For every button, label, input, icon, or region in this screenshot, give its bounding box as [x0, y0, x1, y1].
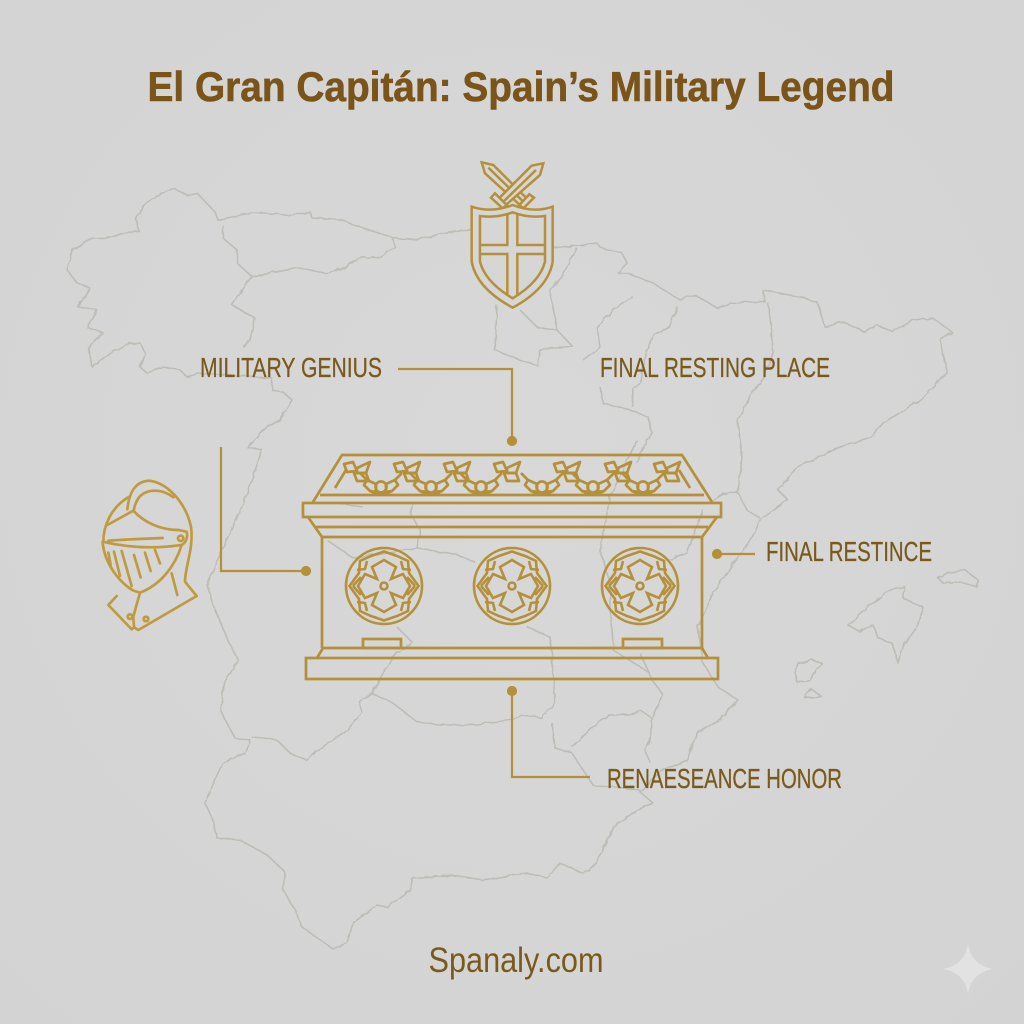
- sarcophagus: [303, 455, 721, 679]
- title: El Gran Capitán: Spain’s Military Legend: [148, 63, 894, 110]
- icon: shield with crossed swords: [472, 162, 553, 308]
- islands: [938, 570, 978, 587]
- lid: [313, 455, 712, 502]
- label: final restince: FINAL RESTINCE: [766, 536, 932, 567]
- body: [322, 537, 702, 648]
- icon: knight helmet: [103, 481, 197, 630]
- label: final resting place: FINAL RESTING PLACE: [600, 352, 830, 383]
- mainland coast: [67, 189, 952, 949]
- northern regions: [223, 225, 395, 276]
- garland frieze: [344, 462, 680, 494]
- label: renaeseance honor: RENAESEANCE HONOR: [607, 763, 842, 794]
- connector: military genius to sarcophagus: [398, 369, 516, 445]
- icon: sparkle watermark: [943, 944, 993, 994]
- connector: left to sarcophagus: [221, 447, 310, 575]
- cornice: [303, 503, 721, 517]
- connector: renaissance honor: [508, 687, 590, 777]
- footer: website: Spanaly.com: [428, 941, 604, 980]
- connector: final restince: [713, 550, 755, 558]
- map: Spain outline with regional borders: [67, 189, 978, 949]
- central regions: [327, 540, 475, 562]
- base: [317, 648, 708, 658]
- rosettes: [346, 548, 678, 624]
- label: military genius: MILITARY GENIUS: [200, 352, 382, 383]
